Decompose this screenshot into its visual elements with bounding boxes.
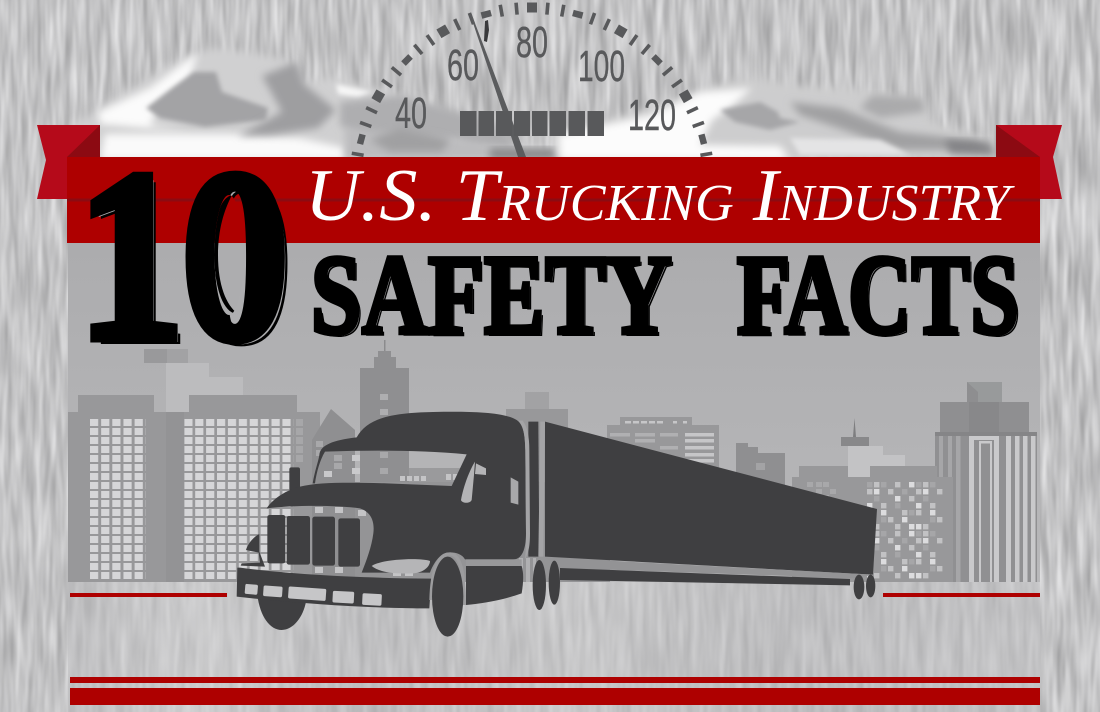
right office blocks (607, 417, 785, 490)
cab windows (461, 462, 518, 505)
odometer (460, 111, 604, 136)
footer stripes (70, 677, 1040, 705)
title: U.S. Trucking Industry: U.S. Trucking Industry (305, 155, 1015, 237)
right tall tower (935, 382, 1037, 582)
speed numbers: 60 (447, 41, 479, 90)
downtown block with mottled windows (792, 466, 953, 582)
left cloud (70, 48, 565, 160)
pointed building and tower (312, 340, 409, 582)
gauge tick marks (351, 2, 713, 157)
semi truck (237, 412, 877, 637)
speed numbers: 80 (516, 18, 548, 67)
wheel arch and skirt (431, 554, 523, 605)
sky (68, 243, 1040, 582)
right ribbon tail (996, 125, 1062, 199)
heading word: Safety: SAFETY (311, 233, 672, 358)
speed numbers: 100 (578, 42, 625, 91)
cab and hood (267, 412, 526, 573)
central low blocks behind truck (315, 392, 610, 582)
opening inside the zero, red over the banner and grey below (214, 195, 236, 315)
front right wheel (432, 557, 463, 637)
clouds (70, 48, 996, 160)
heading word: Facts: FACTS (737, 233, 1020, 358)
red rule right (883, 593, 1040, 597)
banner band (67, 157, 1040, 243)
left skyline (68, 349, 320, 582)
speedometer (351, 2, 713, 157)
rear wheels (533, 560, 875, 610)
speed numbers (395, 18, 676, 140)
left ribbon tail (37, 125, 100, 199)
right cloud (555, 78, 996, 160)
side mirror (241, 534, 265, 567)
red rule left (70, 593, 227, 597)
bumper (237, 568, 431, 608)
big number 10: 10 (77, 120, 286, 391)
city panel (68, 243, 1040, 582)
headlight (372, 559, 430, 574)
needle (470, 14, 526, 157)
speed numbers: 120 (628, 91, 676, 140)
front left tyre (257, 595, 306, 630)
bumper lights (245, 584, 382, 606)
trailer (528, 422, 877, 585)
back stripe of cab (518, 421, 530, 559)
red ribbon banner (37, 125, 1062, 243)
grille panels (267, 515, 360, 567)
exhaust stack (289, 467, 300, 491)
speed numbers: 40 (395, 89, 427, 138)
spire and lit steps (841, 418, 905, 478)
